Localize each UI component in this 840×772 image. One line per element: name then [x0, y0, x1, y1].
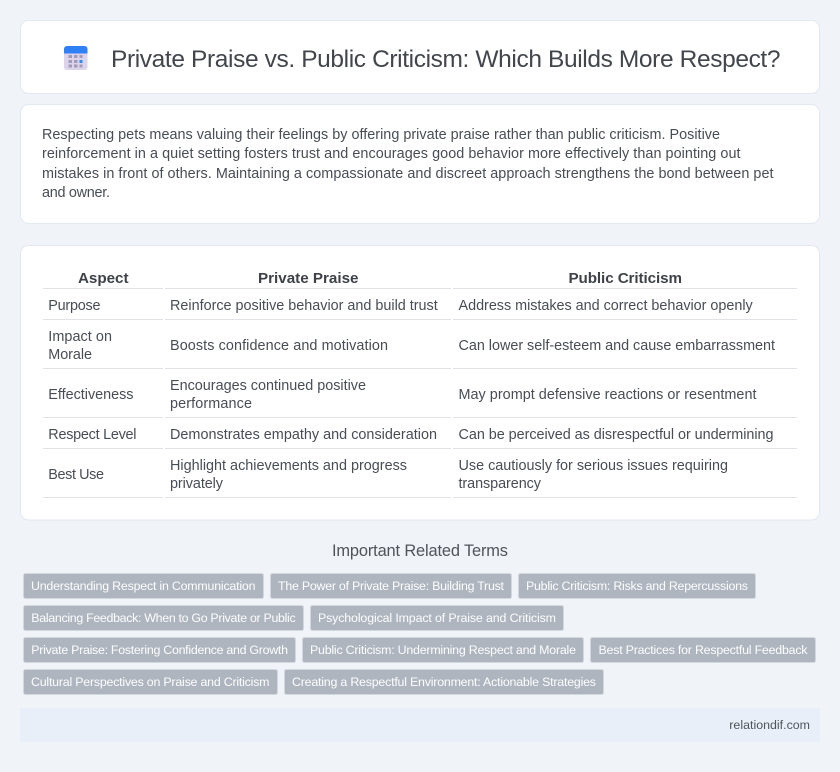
row: effectiveness — [48, 378, 757, 412]
row: effectiveness: May prompt defensive reactions or resentment — [458, 387, 756, 403]
tag: Private Praise: Fostering Confidence and Growth — [31, 643, 288, 657]
table header row — [78, 270, 682, 287]
row: impact on morale — [48, 329, 775, 363]
row: best use — [48, 458, 728, 492]
tag — [24, 670, 278, 694]
intro text: and owner. — [42, 185, 110, 201]
table header row: Public Criticism — [568, 270, 682, 287]
row: respect level — [48, 427, 774, 443]
row: respect level: Can be perceived as disrespectful or undermining — [458, 427, 774, 443]
row: best use: Use cautiously for serious issues requiring — [458, 458, 728, 474]
related terms tags — [24, 574, 816, 694]
footer bar — [20, 708, 820, 742]
row: best use: Best Use — [48, 467, 104, 483]
row: purpose: Reinforce positive behavior and build trust — [170, 298, 438, 314]
footer source text: relationdif.com — [729, 718, 810, 732]
row: impact on morale: Boosts confidence and motivation — [170, 338, 388, 354]
related terms heading: Important Related Terms — [332, 542, 508, 560]
intro text: reinforcement in a quiet setting fosters trust and encourages good behavior more effectively than pointing out — [42, 146, 740, 162]
comparison table panel — [20, 246, 820, 520]
header panel — [20, 20, 820, 94]
row: purpose: Purpose — [48, 298, 100, 314]
row: effectiveness: performance — [170, 396, 252, 412]
row: purpose: Address mistakes and correct behavior openly — [458, 298, 753, 314]
row: respect level: Respect Level — [48, 427, 136, 443]
tag — [270, 574, 512, 598]
title: Private Praise vs. Public Criticism: Which Builds More Respect? — [111, 46, 780, 73]
intro panel — [20, 104, 820, 224]
tag — [24, 606, 304, 630]
row: impact on morale: Morale — [48, 347, 92, 363]
row: effectiveness: Encourages continued positive — [170, 378, 366, 394]
row: effectiveness: Effectiveness — [48, 387, 133, 403]
icon: calendar grid — [64, 46, 88, 70]
tag: Understanding Respect in Communication — [31, 579, 256, 593]
tag — [284, 670, 604, 694]
tag: The Power of Private Praise: Building Trust — [278, 579, 505, 593]
tag: Public Criticism: Risks and Repercussions — [526, 579, 748, 593]
tag: Balancing Feedback: When to Go Private or Public — [31, 611, 296, 625]
tag: Cultural Perspectives on Praise and Criticism — [31, 675, 270, 689]
table header row: Aspect — [78, 270, 128, 287]
tag — [590, 638, 816, 662]
row: purpose — [48, 298, 753, 314]
tag — [310, 606, 564, 630]
tag: Public Criticism: Undermining Respect and Morale — [310, 643, 576, 657]
row: best use: transparency — [458, 476, 542, 492]
row: impact on morale: Impact on — [48, 329, 112, 345]
tag — [24, 638, 296, 662]
tag — [302, 638, 584, 662]
row: respect level: Demonstrates empathy and consideration — [170, 427, 437, 443]
table header row: Private Praise — [258, 270, 358, 287]
row: best use: privately — [170, 476, 224, 492]
tag — [518, 574, 756, 598]
tag: Best Practices for Respectful Feedback — [598, 643, 808, 657]
tag: Creating a Respectful Environment: Actionable Strategies — [292, 675, 596, 689]
intro text: Respecting pets means valuing their feelings by offering private praise rather than public criticism. Positive — [42, 127, 720, 143]
tag: Psychological Impact of Praise and Criticism — [318, 611, 556, 625]
intro text — [42, 127, 774, 201]
tag — [24, 574, 264, 598]
row: best use: Highlight achievements and progress — [170, 458, 407, 474]
intro text: mistakes in front of others. Maintaining a compassionate and discreet approach strengthens the bond between pet — [42, 166, 774, 182]
row: impact on morale: Can lower self-esteem and cause embarrassment — [458, 338, 775, 354]
